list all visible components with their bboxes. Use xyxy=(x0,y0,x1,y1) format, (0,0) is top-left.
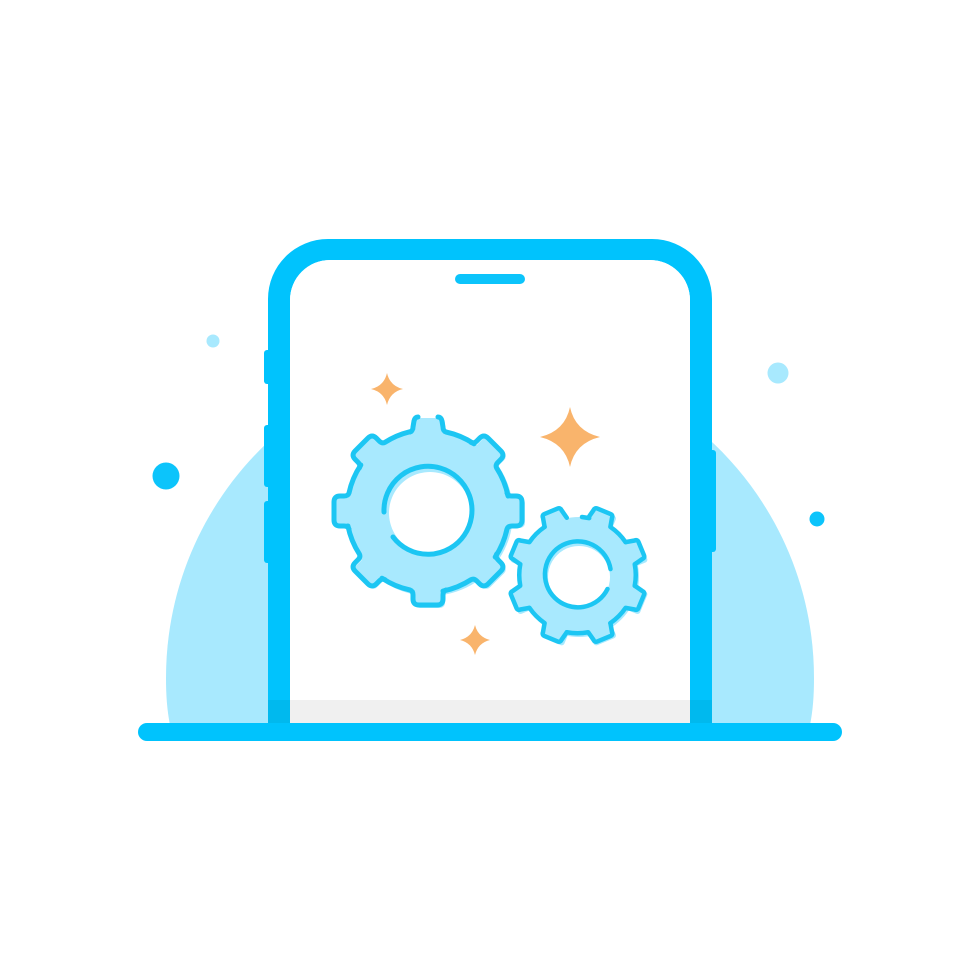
base line xyxy=(138,723,842,741)
decorative dots xyxy=(152,334,824,526)
phone body xyxy=(268,239,712,725)
large gear xyxy=(329,414,527,610)
background semicircle xyxy=(166,354,814,725)
large gear outline xyxy=(329,414,527,610)
phone side buttons xyxy=(264,350,716,563)
large gear fill xyxy=(335,418,525,608)
small gear xyxy=(488,486,670,668)
sparkles xyxy=(371,373,600,655)
small gear fill xyxy=(488,486,670,668)
small gear outline xyxy=(502,507,653,651)
phone speaker xyxy=(455,274,525,284)
